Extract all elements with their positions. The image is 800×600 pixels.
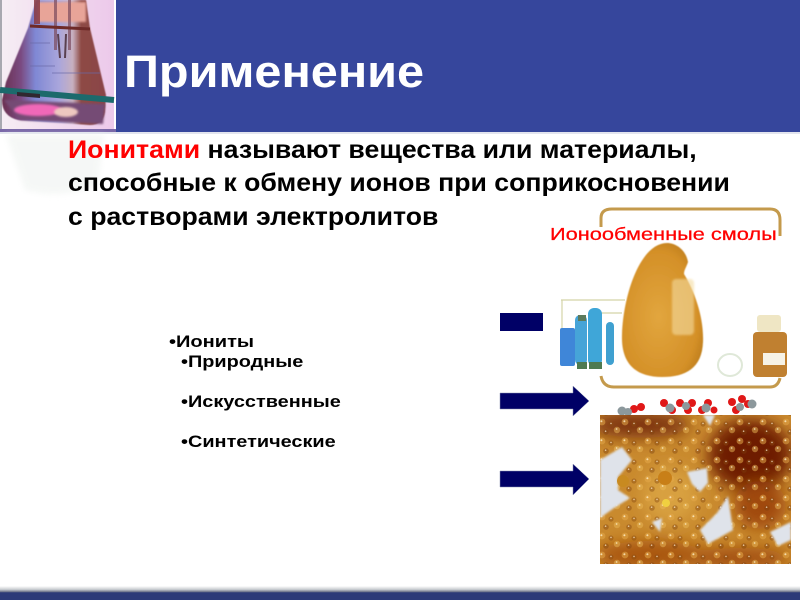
arrow 3 <box>500 464 589 495</box>
definition text: способные к обмену ионов при соприкосновении <box>68 170 730 197</box>
frame of resin picture <box>601 209 780 387</box>
arrow 2 <box>500 386 589 416</box>
image: resin beads photo <box>600 415 791 564</box>
list of ion exchanger types <box>169 331 341 451</box>
definition text: с растворами электролитов <box>68 204 438 231</box>
image: ion exchange resin egg and equipment <box>560 209 787 387</box>
resin egg <box>622 243 703 377</box>
label: ion exchange resins: Ионообменные смолы <box>550 225 777 245</box>
image: glass flask <box>0 0 116 132</box>
flask reflection <box>6 135 104 194</box>
water filter tanks <box>560 300 625 369</box>
arrow 1 (stem only, head hidden behind picture) <box>500 313 543 331</box>
list of ion exchanger types: •Природные <box>181 351 303 371</box>
definition text: Ионитами называют вещества или материалы, <box>68 137 697 164</box>
image: molecules <box>618 395 756 416</box>
resin jar <box>753 315 787 377</box>
list of ion exchanger types: •Иониты <box>169 331 254 351</box>
list of ion exchanger types: •Искусственные <box>181 391 341 411</box>
glass lid <box>718 354 742 376</box>
title: Применение <box>124 47 424 97</box>
neck liquid <box>38 2 86 22</box>
list of ion exchanger types: •Синтетические <box>181 431 336 451</box>
definition text <box>68 137 730 231</box>
header banner <box>0 0 800 134</box>
footer bar <box>0 586 800 600</box>
